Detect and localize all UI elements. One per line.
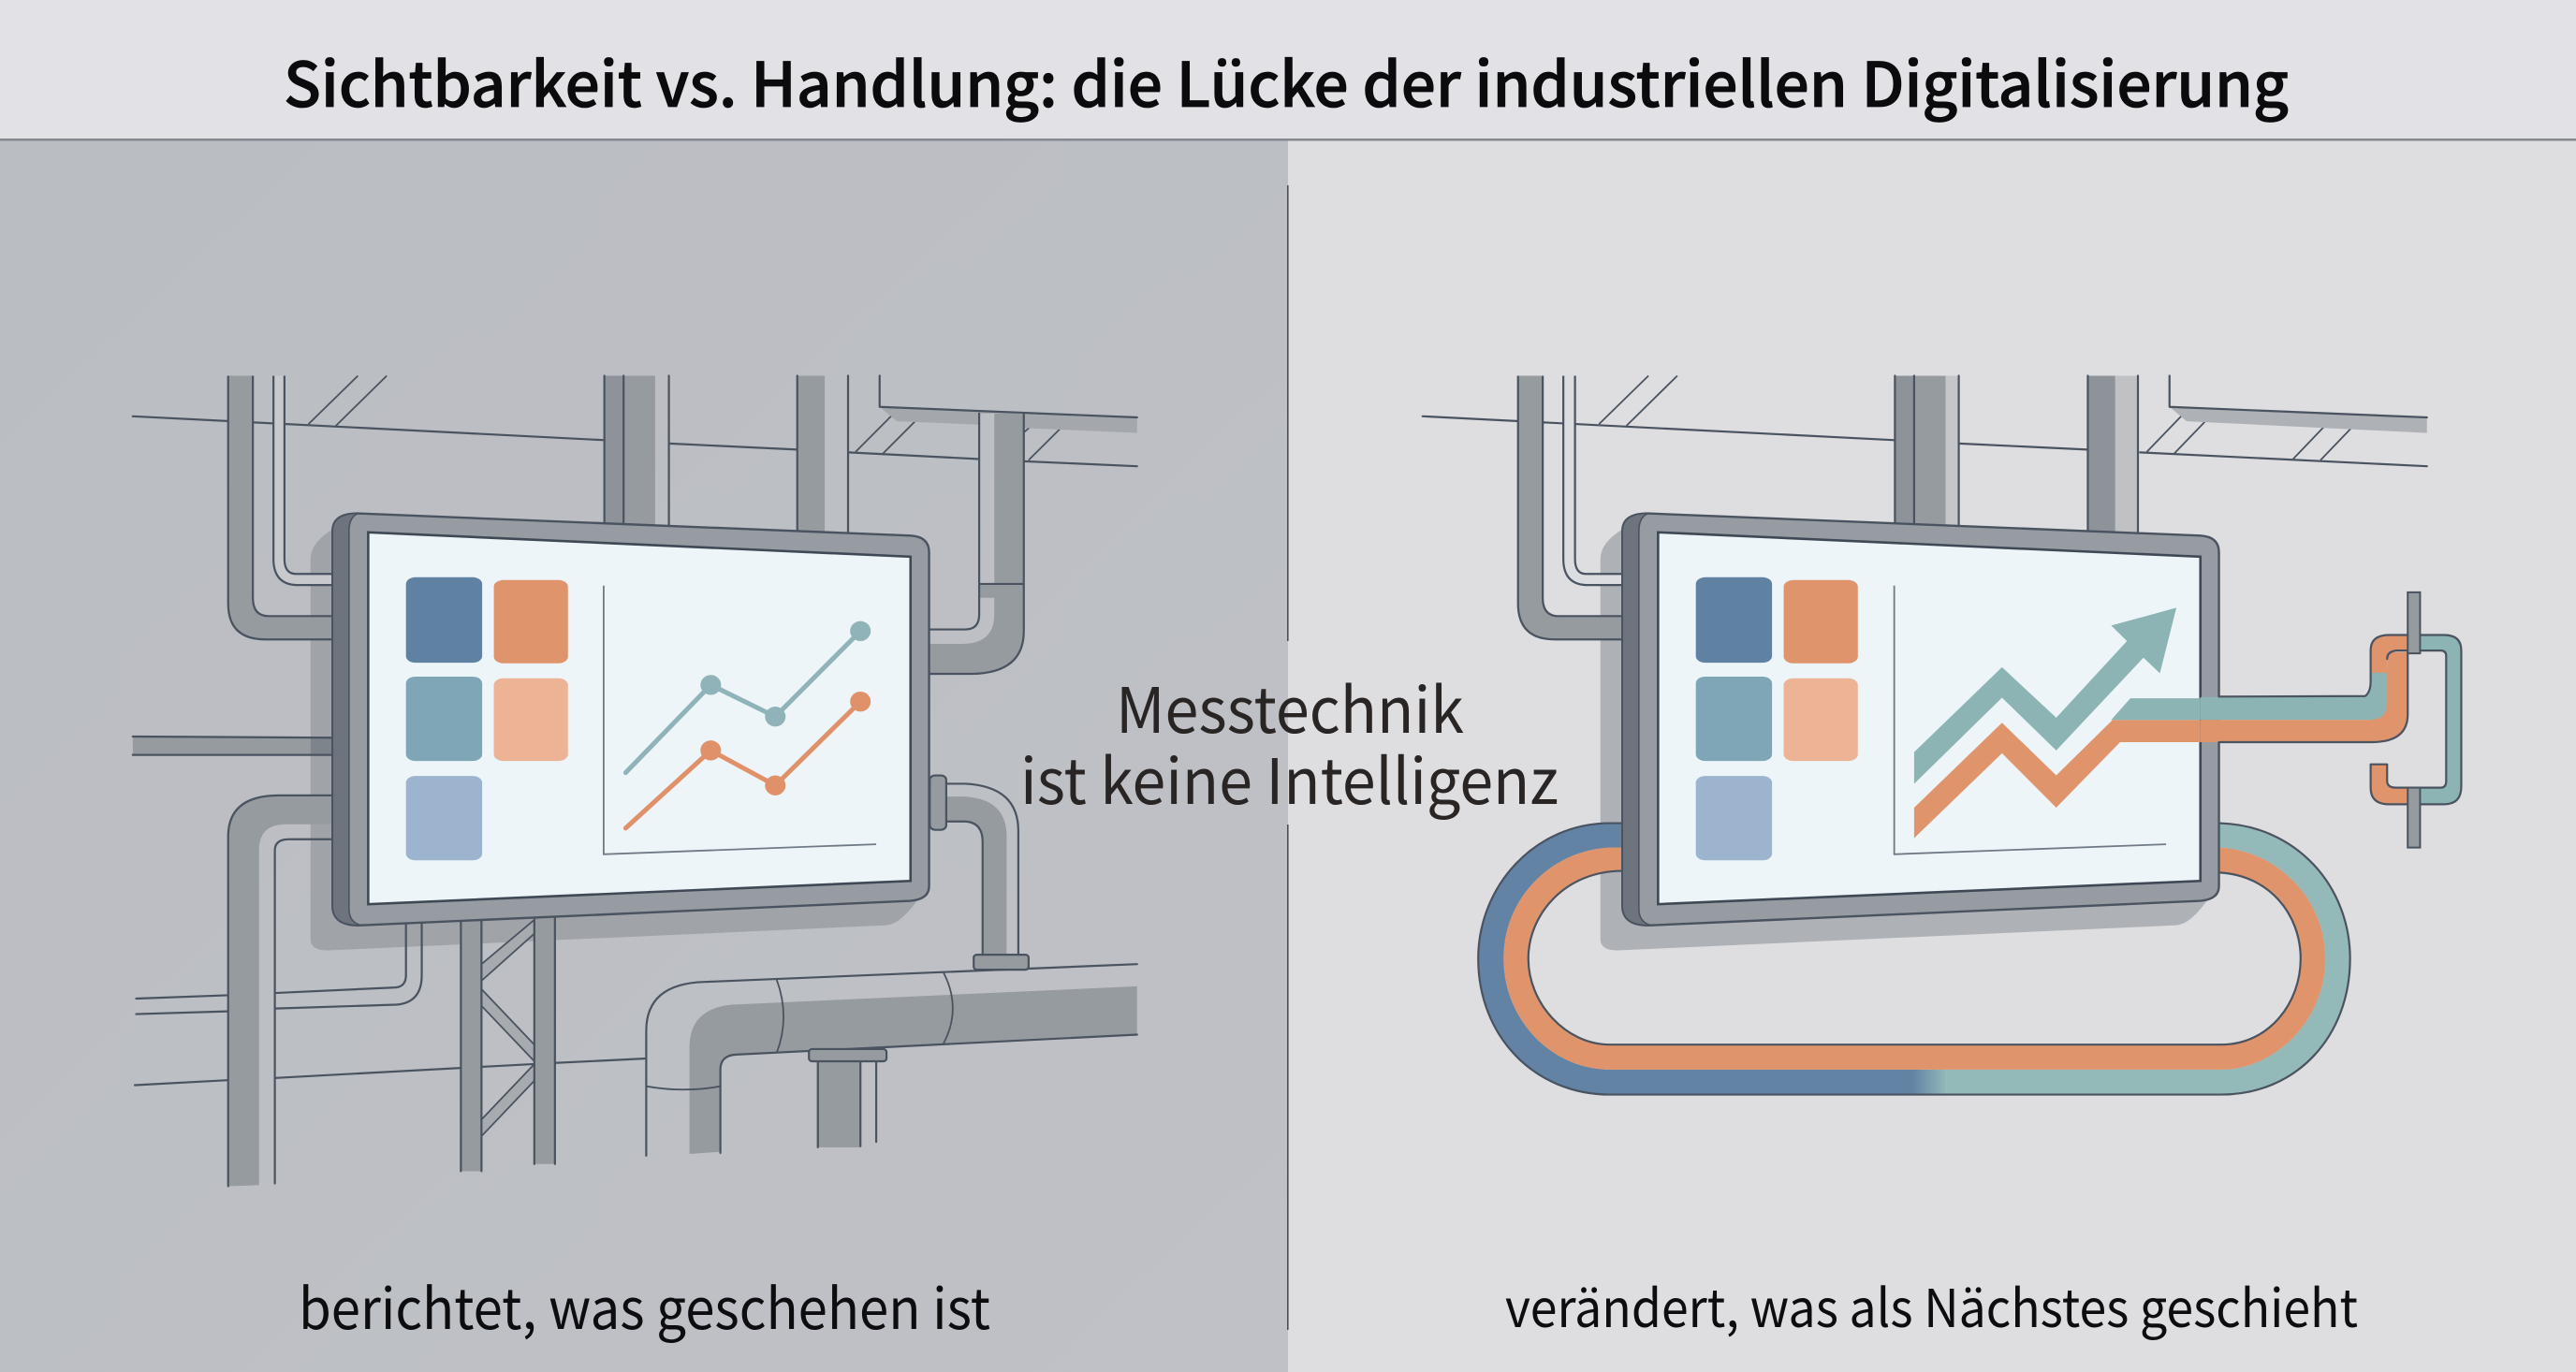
pipe: upper right elbow xyxy=(929,414,1024,674)
pipe: right elbow to main xyxy=(929,776,1018,956)
pipe: large lower left xyxy=(228,795,332,1186)
panel: left, passive background xyxy=(0,139,1288,1372)
chart: teal rising arrow xyxy=(1914,607,2176,783)
pipe: vertical centre right xyxy=(2087,376,2138,534)
loop: blend xyxy=(1912,1070,1946,1095)
chart: orange line xyxy=(625,692,871,828)
chart axes xyxy=(1895,586,2166,854)
monitor screen xyxy=(1658,533,2201,904)
monitor xyxy=(332,514,929,926)
outlines xyxy=(2219,635,2461,804)
monitor left side xyxy=(1622,514,1651,926)
panel: header background xyxy=(0,0,2576,139)
pipe: large main bottom right xyxy=(646,955,1137,1156)
monitor shadow xyxy=(1601,529,2207,950)
outflow: teal layer xyxy=(2201,670,2390,720)
pipe: thin upper left elbow xyxy=(273,376,332,585)
illustration: right, dashboard driving a closed action loop xyxy=(1423,376,2461,1095)
ceiling structure xyxy=(1423,376,2427,466)
monitor shadow xyxy=(311,529,917,950)
loop: teal outer band xyxy=(1946,824,2350,1095)
pipe: vertical centre left xyxy=(605,376,669,529)
chart: teal line xyxy=(625,621,871,773)
outflow: orange layer xyxy=(2201,652,2408,742)
panel: right, active background xyxy=(1288,139,2576,1372)
loop: orange inner band xyxy=(1503,848,2325,1070)
pipe: thin upper left elbow xyxy=(1563,376,1622,585)
line one: Messtechnik xyxy=(1116,661,1464,752)
central statement xyxy=(1020,661,1559,823)
action loop xyxy=(1478,824,2350,1095)
chart axes xyxy=(604,586,876,854)
loop: outlines xyxy=(1478,824,2350,1095)
centre divider, upper part xyxy=(1287,185,1289,641)
monitor screen xyxy=(368,533,911,904)
bypass: orange lower bracket xyxy=(2371,765,2408,804)
chart: orange band xyxy=(1914,720,2201,839)
monitor frame xyxy=(332,514,929,926)
pipe: upper left elbow xyxy=(228,376,332,639)
pipe: upper left elbow xyxy=(1518,376,1622,639)
monitor frame xyxy=(1622,514,2219,926)
valve stem xyxy=(2408,592,2420,848)
caption: right: verändert, was als Nächstes geschieht xyxy=(1505,1267,2358,1343)
ceiling structure xyxy=(133,376,1137,466)
pipe: vertical centre right xyxy=(798,376,848,534)
truss support xyxy=(461,917,555,1171)
caption: left: berichtet, was geschehen ist xyxy=(299,1264,990,1346)
bypass: teal bracket xyxy=(2420,635,2461,804)
title: Sichtbarkeit vs. Handlung: die Lücke der industriellen Digitalisierung xyxy=(284,36,2289,125)
monitor xyxy=(1622,514,2219,926)
header rule xyxy=(0,139,2576,140)
centre divider, lower part xyxy=(1287,825,1289,1330)
chart: teal outflow band xyxy=(2111,698,2201,720)
bypass: orange upper bracket xyxy=(2371,635,2408,673)
monitor left side xyxy=(332,514,361,926)
dashboard tiles xyxy=(406,577,568,860)
pipe: left horizontal xyxy=(133,737,332,755)
output pipe with valve bypass xyxy=(2201,592,2461,848)
line two: ist keine Intelligenz xyxy=(1020,732,1559,823)
dashboard tiles xyxy=(1696,577,1858,860)
pipe: vertical centre left xyxy=(1895,376,1959,529)
loop: blue outer band xyxy=(1478,824,1919,1095)
thin lines lower left xyxy=(135,923,646,1085)
illustration: left, passive dashboard among pipes xyxy=(133,376,1137,1186)
